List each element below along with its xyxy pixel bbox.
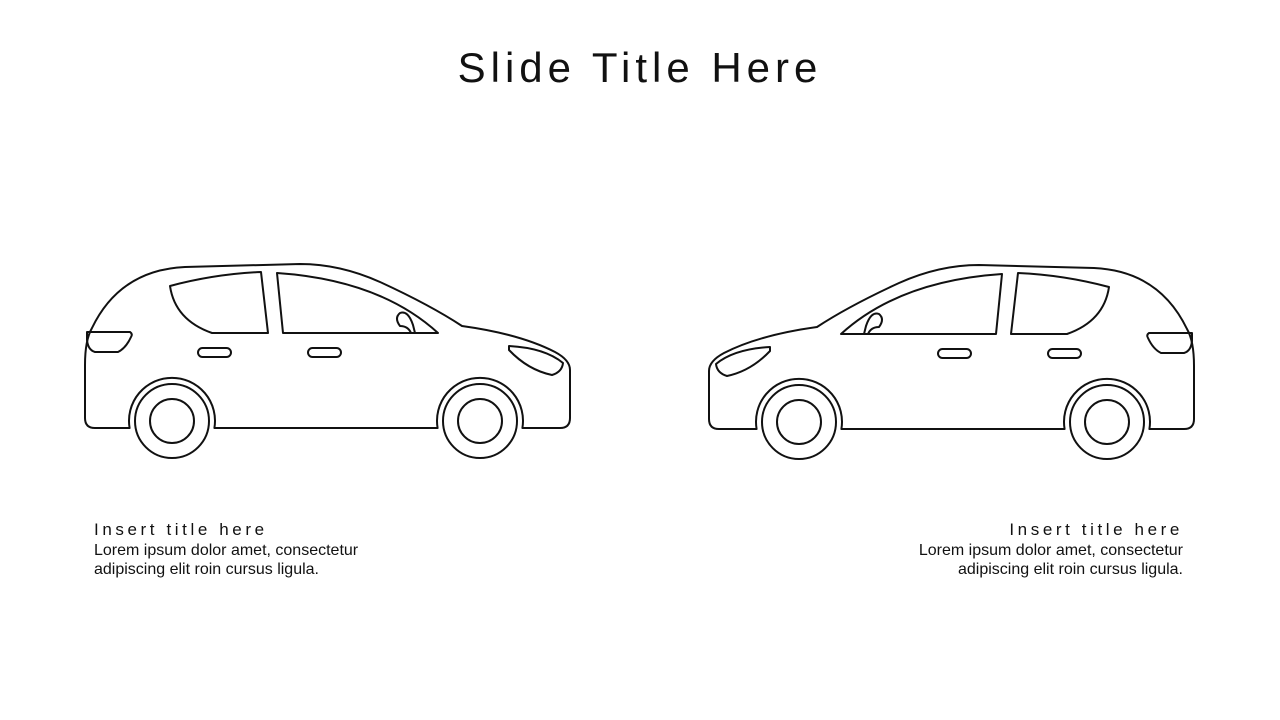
text block: right: Insert title here bbox=[1009, 520, 1183, 539]
text block: right: adipiscing elit roin cursus ligula. bbox=[958, 561, 1183, 578]
text block: left: Insert title here bbox=[94, 520, 268, 539]
text block: right bbox=[919, 520, 1183, 578]
text block: right: Lorem ipsum dolor amet, consectetur bbox=[919, 542, 1183, 559]
title: Slide Title Here bbox=[458, 44, 822, 91]
text block: left bbox=[94, 520, 358, 578]
car: left bbox=[85, 264, 570, 458]
text block: left: adipiscing elit roin cursus ligula. bbox=[94, 561, 319, 578]
text block: left: Lorem ipsum dolor amet, consectetur bbox=[94, 542, 358, 559]
car: right bbox=[709, 265, 1194, 459]
